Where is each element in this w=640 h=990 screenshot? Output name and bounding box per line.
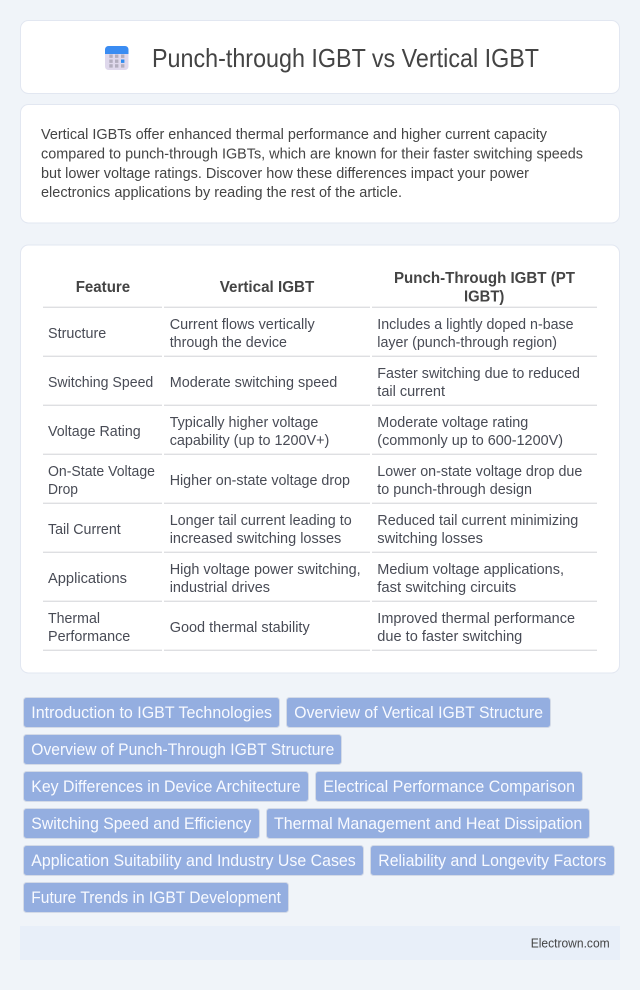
row: applications (48, 562, 564, 596)
intro text: compared to punch-through IGBTs, which are known for their faster switching speeds (41, 145, 583, 162)
row: voltage rating: Voltage Rating (48, 424, 141, 440)
row: on-state voltage drop: Drop (48, 482, 78, 498)
row: on-state voltage drop: Lower on-state voltage drop due (377, 464, 582, 480)
row: structure: layer (punch-through region) (377, 335, 557, 351)
row: structure (48, 317, 574, 351)
tag (24, 882, 288, 912)
row: voltage rating (48, 415, 563, 449)
row: switching speed: Moderate switching speed (170, 375, 337, 391)
row: structure: Structure (48, 326, 106, 342)
row: applications: Applications (48, 571, 127, 587)
row: tail current: switching losses (377, 531, 483, 547)
tag: Thermal Management and Heat Dissipation (274, 814, 582, 833)
tag: Introduction to IGBT Technologies (31, 703, 272, 722)
footer: Electrown.com (531, 936, 610, 950)
tag: Switching Speed and Efficiency (31, 814, 252, 833)
row: structure: Includes a lightly doped n-base (377, 317, 574, 333)
row: voltage rating: Typically higher voltage (170, 415, 318, 431)
intro text: Vertical IGBTs offer enhanced thermal performance and higher current capacity (41, 126, 547, 143)
row: switching speed (48, 366, 580, 400)
row: tail current: Longer tail current leading to (170, 513, 352, 529)
tag (370, 846, 614, 876)
row: tail current: Reduced tail current minimizing (377, 513, 578, 529)
tag (24, 808, 260, 838)
table header row: Punch-Through IGBT (PT (394, 270, 575, 287)
tag (24, 734, 342, 764)
tag (24, 846, 364, 876)
row: tail current: increased switching losses (170, 531, 341, 547)
tag: Overview of Punch-Through IGBT Structure (31, 740, 334, 759)
row: thermal performance: Good thermal stability (170, 620, 310, 636)
intro text: but lower voltage ratings. Discover how these differences impact your power (41, 165, 529, 182)
row: thermal performance (48, 611, 575, 645)
intro text (41, 126, 583, 201)
tag (316, 772, 582, 802)
tag: Reliability and Longevity Factors (378, 851, 606, 870)
row: structure: Current flows vertically (170, 317, 315, 333)
table header row (76, 270, 575, 306)
footer (20, 926, 620, 960)
tag: Key Differences in Device Architecture (31, 777, 301, 796)
tag (24, 698, 280, 728)
intro text: electronics applications by reading the rest of the article. (41, 184, 402, 201)
row: applications: High voltage power switching, (170, 562, 361, 578)
table header row: IGBT) (464, 288, 504, 306)
row: on-state voltage drop: On-State Voltage (48, 464, 155, 480)
row: thermal performance: Thermal (48, 611, 100, 627)
row: voltage rating: (commonly up to 600-1200V) (377, 433, 563, 449)
title: Punch-through IGBT vs Vertical IGBT (152, 43, 539, 73)
tag: Overview of Vertical IGBT Structure (294, 703, 543, 722)
row: applications: industrial drives (170, 580, 270, 596)
panel: introduction (20, 104, 620, 223)
row: switching speed: Switching Speed (48, 375, 153, 391)
tag (24, 772, 308, 802)
row: tail current: Tail Current (48, 522, 121, 538)
row: voltage rating: Moderate voltage rating (377, 415, 528, 431)
tag: Electrical Performance Comparison (323, 777, 575, 796)
panel: comparison table (20, 245, 620, 673)
panel: header (20, 20, 620, 94)
table header row: Vertical IGBT (220, 279, 315, 296)
row: thermal performance: Improved thermal performance (377, 611, 575, 627)
icon: calendar (105, 46, 128, 70)
row: applications: Medium voltage applications, (377, 562, 564, 578)
row: applications: fast switching circuits (377, 580, 516, 596)
row: tail current (48, 513, 578, 547)
tag: Future Trends in IGBT Development (31, 888, 281, 907)
row: voltage rating: capability (up to 1200V+) (170, 433, 329, 449)
row: switching speed: tail current (377, 384, 445, 400)
table header row: Feature (76, 279, 130, 296)
row: structure: through the device (170, 335, 287, 351)
row: on-state voltage drop (48, 464, 582, 498)
row: on-state voltage drop: Higher on-state voltage drop (170, 473, 350, 489)
row: on-state voltage drop: to punch-through design (377, 482, 532, 498)
row: thermal performance: Performance (48, 629, 130, 645)
row: switching speed: Faster switching due to reduced (377, 366, 580, 382)
tag (286, 698, 550, 728)
panel: topic tags (24, 698, 614, 912)
tag: Application Suitability and Industry Use Cases (31, 851, 356, 870)
row: thermal performance: due to faster switching (377, 629, 522, 645)
tag (266, 808, 590, 838)
